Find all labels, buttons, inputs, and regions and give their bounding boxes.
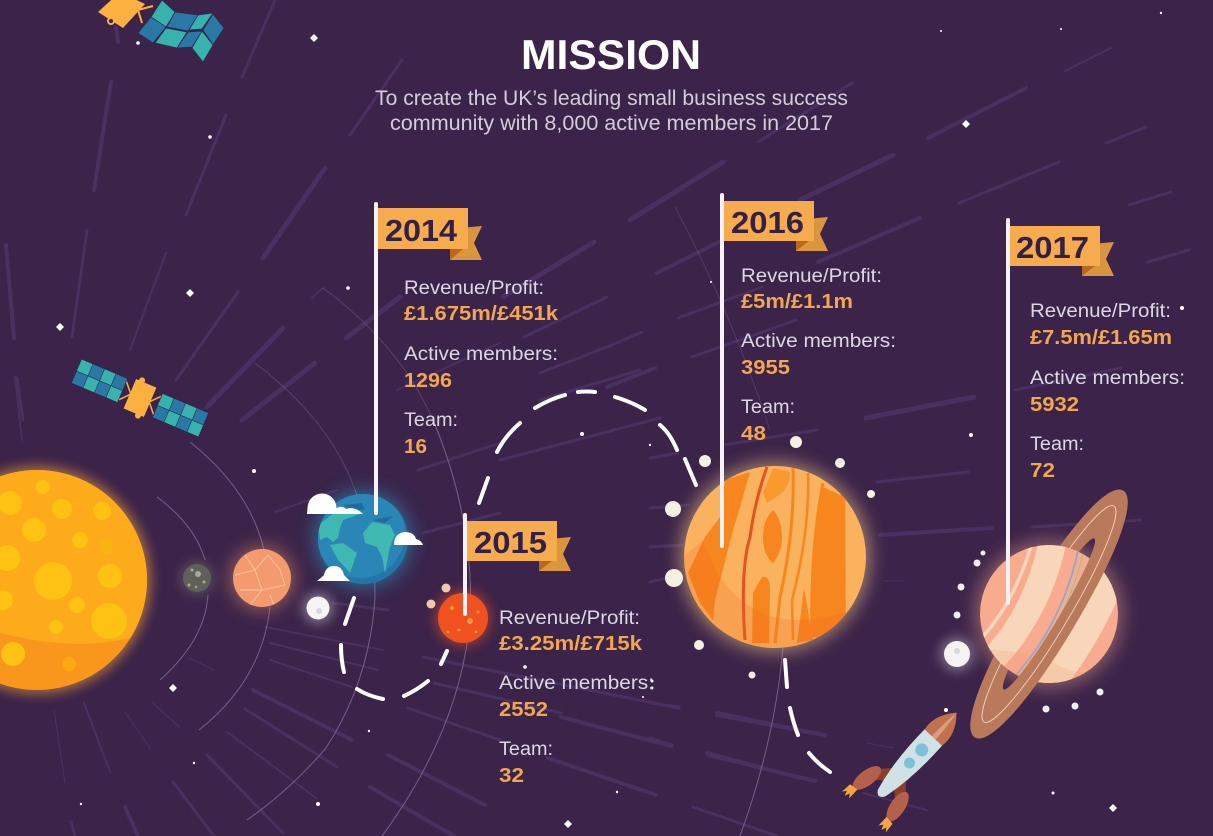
- mission statement: community with 8,000 active members in 2017: [390, 112, 833, 135]
- white moon: [303, 593, 333, 623]
- flag 2015: [463, 513, 571, 616]
- red planet: [426, 584, 491, 646]
- stats 2016: 3955: [741, 357, 790, 379]
- earth: [314, 488, 412, 588]
- stats 2017: Revenue/Profit:: [1030, 301, 1171, 322]
- stats 2015: [499, 608, 654, 787]
- saturn: [934, 490, 1134, 738]
- flag 2017: 2017: [1016, 230, 1089, 265]
- stats 2014: [404, 278, 559, 458]
- stats 2016: Revenue/Profit:: [741, 266, 882, 287]
- stats 2016: 48: [741, 423, 766, 445]
- stats 2017: Team:: [1030, 434, 1084, 455]
- mission statement: To create the UK’s leading small business success: [375, 87, 848, 110]
- stats 2016: Active members:: [741, 331, 896, 352]
- stats 2014: Active members:: [404, 344, 558, 365]
- stats 2014: 1296: [404, 370, 452, 392]
- flag 2017: [1006, 218, 1114, 605]
- stats 2017: £7.5m/£1.65m: [1030, 327, 1172, 349]
- stats 2015: £3.25m/£715k: [499, 633, 643, 655]
- flag 2016: [720, 193, 828, 548]
- flag 2014: 2014: [385, 213, 458, 248]
- stats 2017: [1030, 301, 1185, 482]
- orbit lines: [157, 207, 783, 836]
- stats 2015: Revenue/Profit:: [499, 608, 640, 629]
- stats 2016: Team:: [741, 397, 795, 418]
- stats 2017: 72: [1030, 460, 1055, 482]
- stats 2014: Team:: [404, 410, 458, 431]
- stats 2014: £1.675m/£451k: [404, 303, 559, 325]
- jupiter: [665, 436, 875, 678]
- stats 2016: [741, 266, 896, 445]
- flag 2015: 2015: [474, 525, 547, 560]
- flag 2014: [374, 202, 482, 515]
- stats 2016: £5m/£1.1m: [741, 291, 853, 313]
- stats 2017: 5932: [1030, 394, 1079, 416]
- rocket: [840, 691, 979, 834]
- stats 2017: Active members:: [1030, 368, 1185, 389]
- satellite top: [98, 0, 224, 62]
- title: MISSION: [521, 31, 701, 78]
- mars: [230, 546, 294, 610]
- mission statement: [375, 87, 848, 135]
- stats 2014: Revenue/Profit:: [404, 278, 544, 299]
- clouds: [307, 493, 423, 581]
- satellite left: [69, 353, 211, 443]
- grey moon: [180, 561, 214, 595]
- stats 2014: 16: [404, 436, 427, 458]
- stats 2015: Active members:: [499, 673, 654, 694]
- stats 2015: 32: [499, 765, 524, 787]
- stats 2015: Team:: [499, 739, 553, 760]
- stats 2015: 2552: [499, 699, 548, 721]
- flag 2016: 2016: [731, 205, 804, 240]
- flight path dashes: [341, 392, 830, 772]
- sun: [0, 460, 151, 694]
